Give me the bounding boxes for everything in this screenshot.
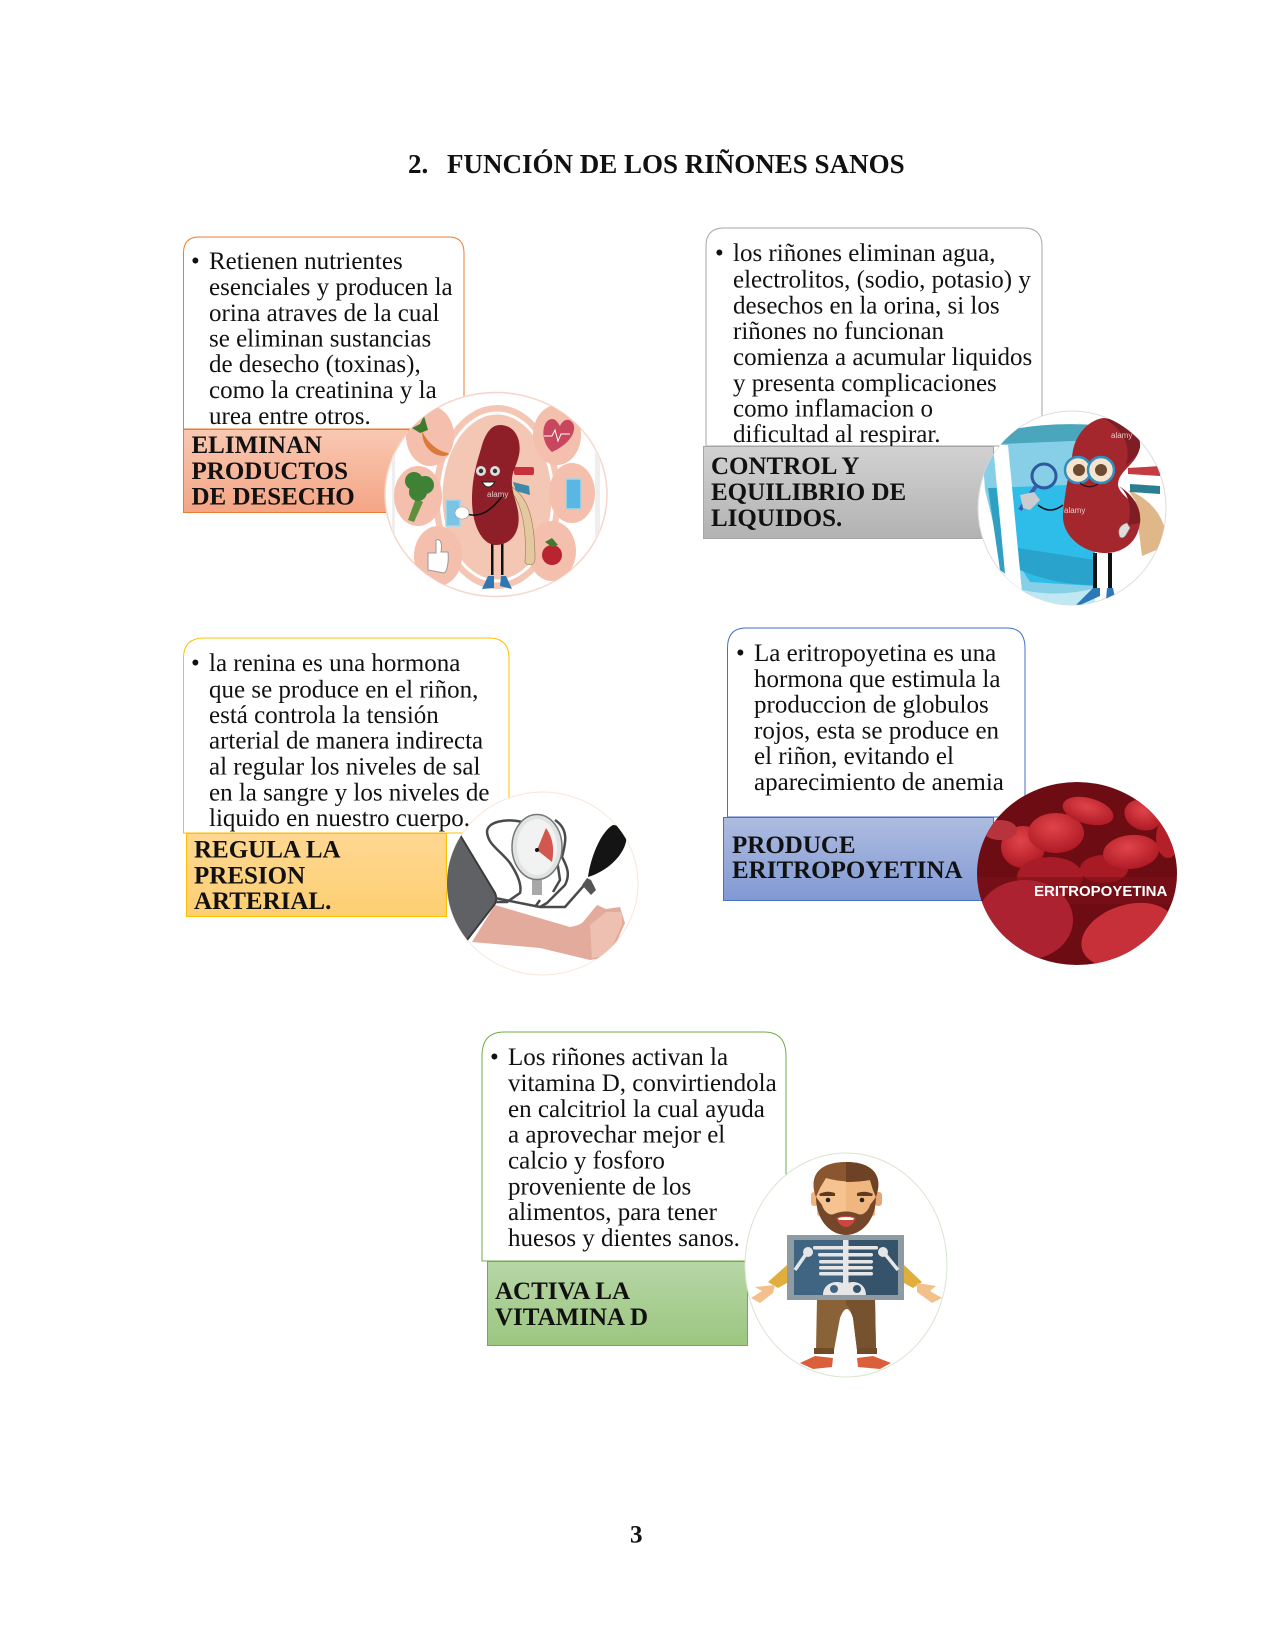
heading bar: activa la vitamina d [488, 1262, 748, 1346]
heading bar: eliminan productos de desecho [184, 430, 408, 512]
heading bar: produce eritropoyetina: PRODUCE [732, 832, 856, 859]
heading bar: produce eritropoyetina [724, 818, 994, 900]
text box: presion: • [191, 650, 200, 677]
icon: red blood cells: ERITROPOYETINA [1034, 883, 1168, 900]
text box: eritropoyetina [728, 628, 1025, 817]
text box: liquidos: comienza a acumular liquidos [733, 344, 1032, 371]
heading bar: activa la vitamina d: ACTIVA LA [495, 1278, 630, 1305]
text box: vitamina d: proveniente de los [508, 1173, 691, 1200]
text box: presion: la renina es una hormona [209, 650, 460, 677]
heading bar: control y equilibrio: LIQUIDOS. [711, 505, 842, 532]
text box: eritropoyetina: produccion de globulos [754, 692, 989, 719]
heading bar: regula la presion arterial [186, 834, 446, 916]
panel: control y equilibrio de liquidos [704, 228, 1168, 610]
icon: kidney with healthy items: alamy [487, 490, 508, 499]
text box: desecho: se eliminan sustancias [209, 326, 431, 353]
heading bar: regula la presion arterial: PRESION [194, 862, 305, 890]
text box: desecho: orina atraves de la cual [209, 300, 439, 327]
text box: eritropoyetina: el riñon, evitando el [754, 743, 954, 770]
text box: eritropoyetina: • [736, 640, 745, 667]
heading bar: eliminan productos de desecho: PRODUCTOS [192, 458, 348, 485]
panel: eliminan productos de desecho [184, 237, 607, 596]
text box: presion: liquido en nuestro cuerpo. [209, 805, 470, 832]
icon: kidney with magnifier and water glass: alamy [1111, 431, 1132, 440]
text box: eritropoyetina: rojos, esta se produce en [754, 717, 1000, 744]
heading bar: eliminan productos de desecho: ELIMINAN [192, 432, 322, 459]
text box: presion: arterial de manera indirecta [209, 727, 483, 754]
text box: presion: en la sangre y los niveles de [209, 780, 489, 806]
text box: liquidos: riñones no funcionan [733, 318, 945, 345]
heading bar: regula la presion arterial: ARTERIAL. [194, 888, 331, 915]
heading bar: activa la vitamina d: VITAMINA D [495, 1304, 648, 1331]
text box: desecho: Retienen nutrientes [209, 248, 403, 275]
icon: blood pressure cuff [440, 792, 638, 975]
text box: desecho: como la creatinina y la [209, 377, 437, 404]
text box: liquidos: como inflamacion o [733, 396, 933, 423]
text box: liquidos: los riñones eliminan agua, [733, 240, 995, 267]
text box: desecho: urea entre otros. [209, 403, 371, 430]
text box: presion [184, 638, 509, 833]
panel: activa la vitamina d [482, 1032, 947, 1377]
icon: kidney with healthy items [385, 392, 607, 596]
text box: presion: está controla la tensión [209, 702, 439, 729]
text box: presion: al regular los niveles de sal [209, 754, 480, 781]
heading bar: regula la presion arterial: REGULA LA [194, 836, 341, 864]
text box: vitamina d: en calcitriol la cual ayuda [508, 1096, 765, 1123]
text box: vitamina d: alimentos, para tener [508, 1199, 718, 1226]
title: FUNCIÓN DE LOS RIÑONES SANOS [447, 149, 905, 179]
text box: desecho: esenciales y producen la [209, 274, 453, 301]
page number: 3 [630, 1522, 642, 1548]
text box: vitamina d: huesos y dientes sanos. [508, 1225, 740, 1252]
text box: liquidos: electrolitos, (sodio, potasio) y [733, 267, 1031, 294]
text box: presion: que se produce en el riñon, [209, 676, 478, 703]
text box: vitamina d: Los riñones activan la [508, 1044, 728, 1071]
text box: eritropoyetina: hormona que estimula la [754, 666, 1000, 693]
heading bar: control y equilibrio [704, 446, 994, 538]
text box: eritropoyetina: aparecimiento de anemia [754, 769, 1004, 796]
text box: liquidos: dificultad al respirar. [733, 421, 941, 448]
text box: liquidos: y presenta complicaciones [733, 370, 997, 397]
icon: kidney with magnifier and water glass: alamy [1064, 506, 1085, 515]
panel: regula la presion arterial [184, 638, 638, 975]
heading bar: control y equilibrio: CONTROL Y [711, 453, 859, 480]
heading bar: produce eritropoyetina: ERITROPOYETINA [732, 857, 963, 884]
text box: eritropoyetina: La eritropoyetina es una [754, 640, 996, 667]
text box: vitamina d: vitamina D, convirtiendola [508, 1070, 777, 1097]
panel: produce eritropoyetina [724, 628, 1183, 978]
title: 2. [408, 149, 428, 179]
text box: liquidos [706, 228, 1042, 448]
text box: desecho: • [191, 248, 200, 275]
heading bar: eliminan productos de desecho: DE DESECHO [192, 484, 355, 510]
text box: desecho: de desecho (toxinas), [209, 351, 421, 378]
icon: man holding x-ray [745, 1153, 947, 1377]
heading bar: control y equilibrio: EQUILIBRIO DE [711, 479, 906, 506]
text box: vitamina d [482, 1032, 786, 1261]
text box: liquidos: • [715, 240, 724, 267]
text box: vitamina d: • [490, 1044, 499, 1071]
text box: liquidos: desechos en la orina, si los [733, 292, 1000, 319]
icon: kidney with magnifier and water glass [978, 411, 1168, 610]
text box: vitamina d: a aprovechar mejor el [508, 1122, 725, 1149]
text box: desecho [184, 237, 464, 430]
text box: vitamina d: calcio y fosforo [508, 1148, 665, 1174]
icon: red blood cells [977, 782, 1183, 978]
